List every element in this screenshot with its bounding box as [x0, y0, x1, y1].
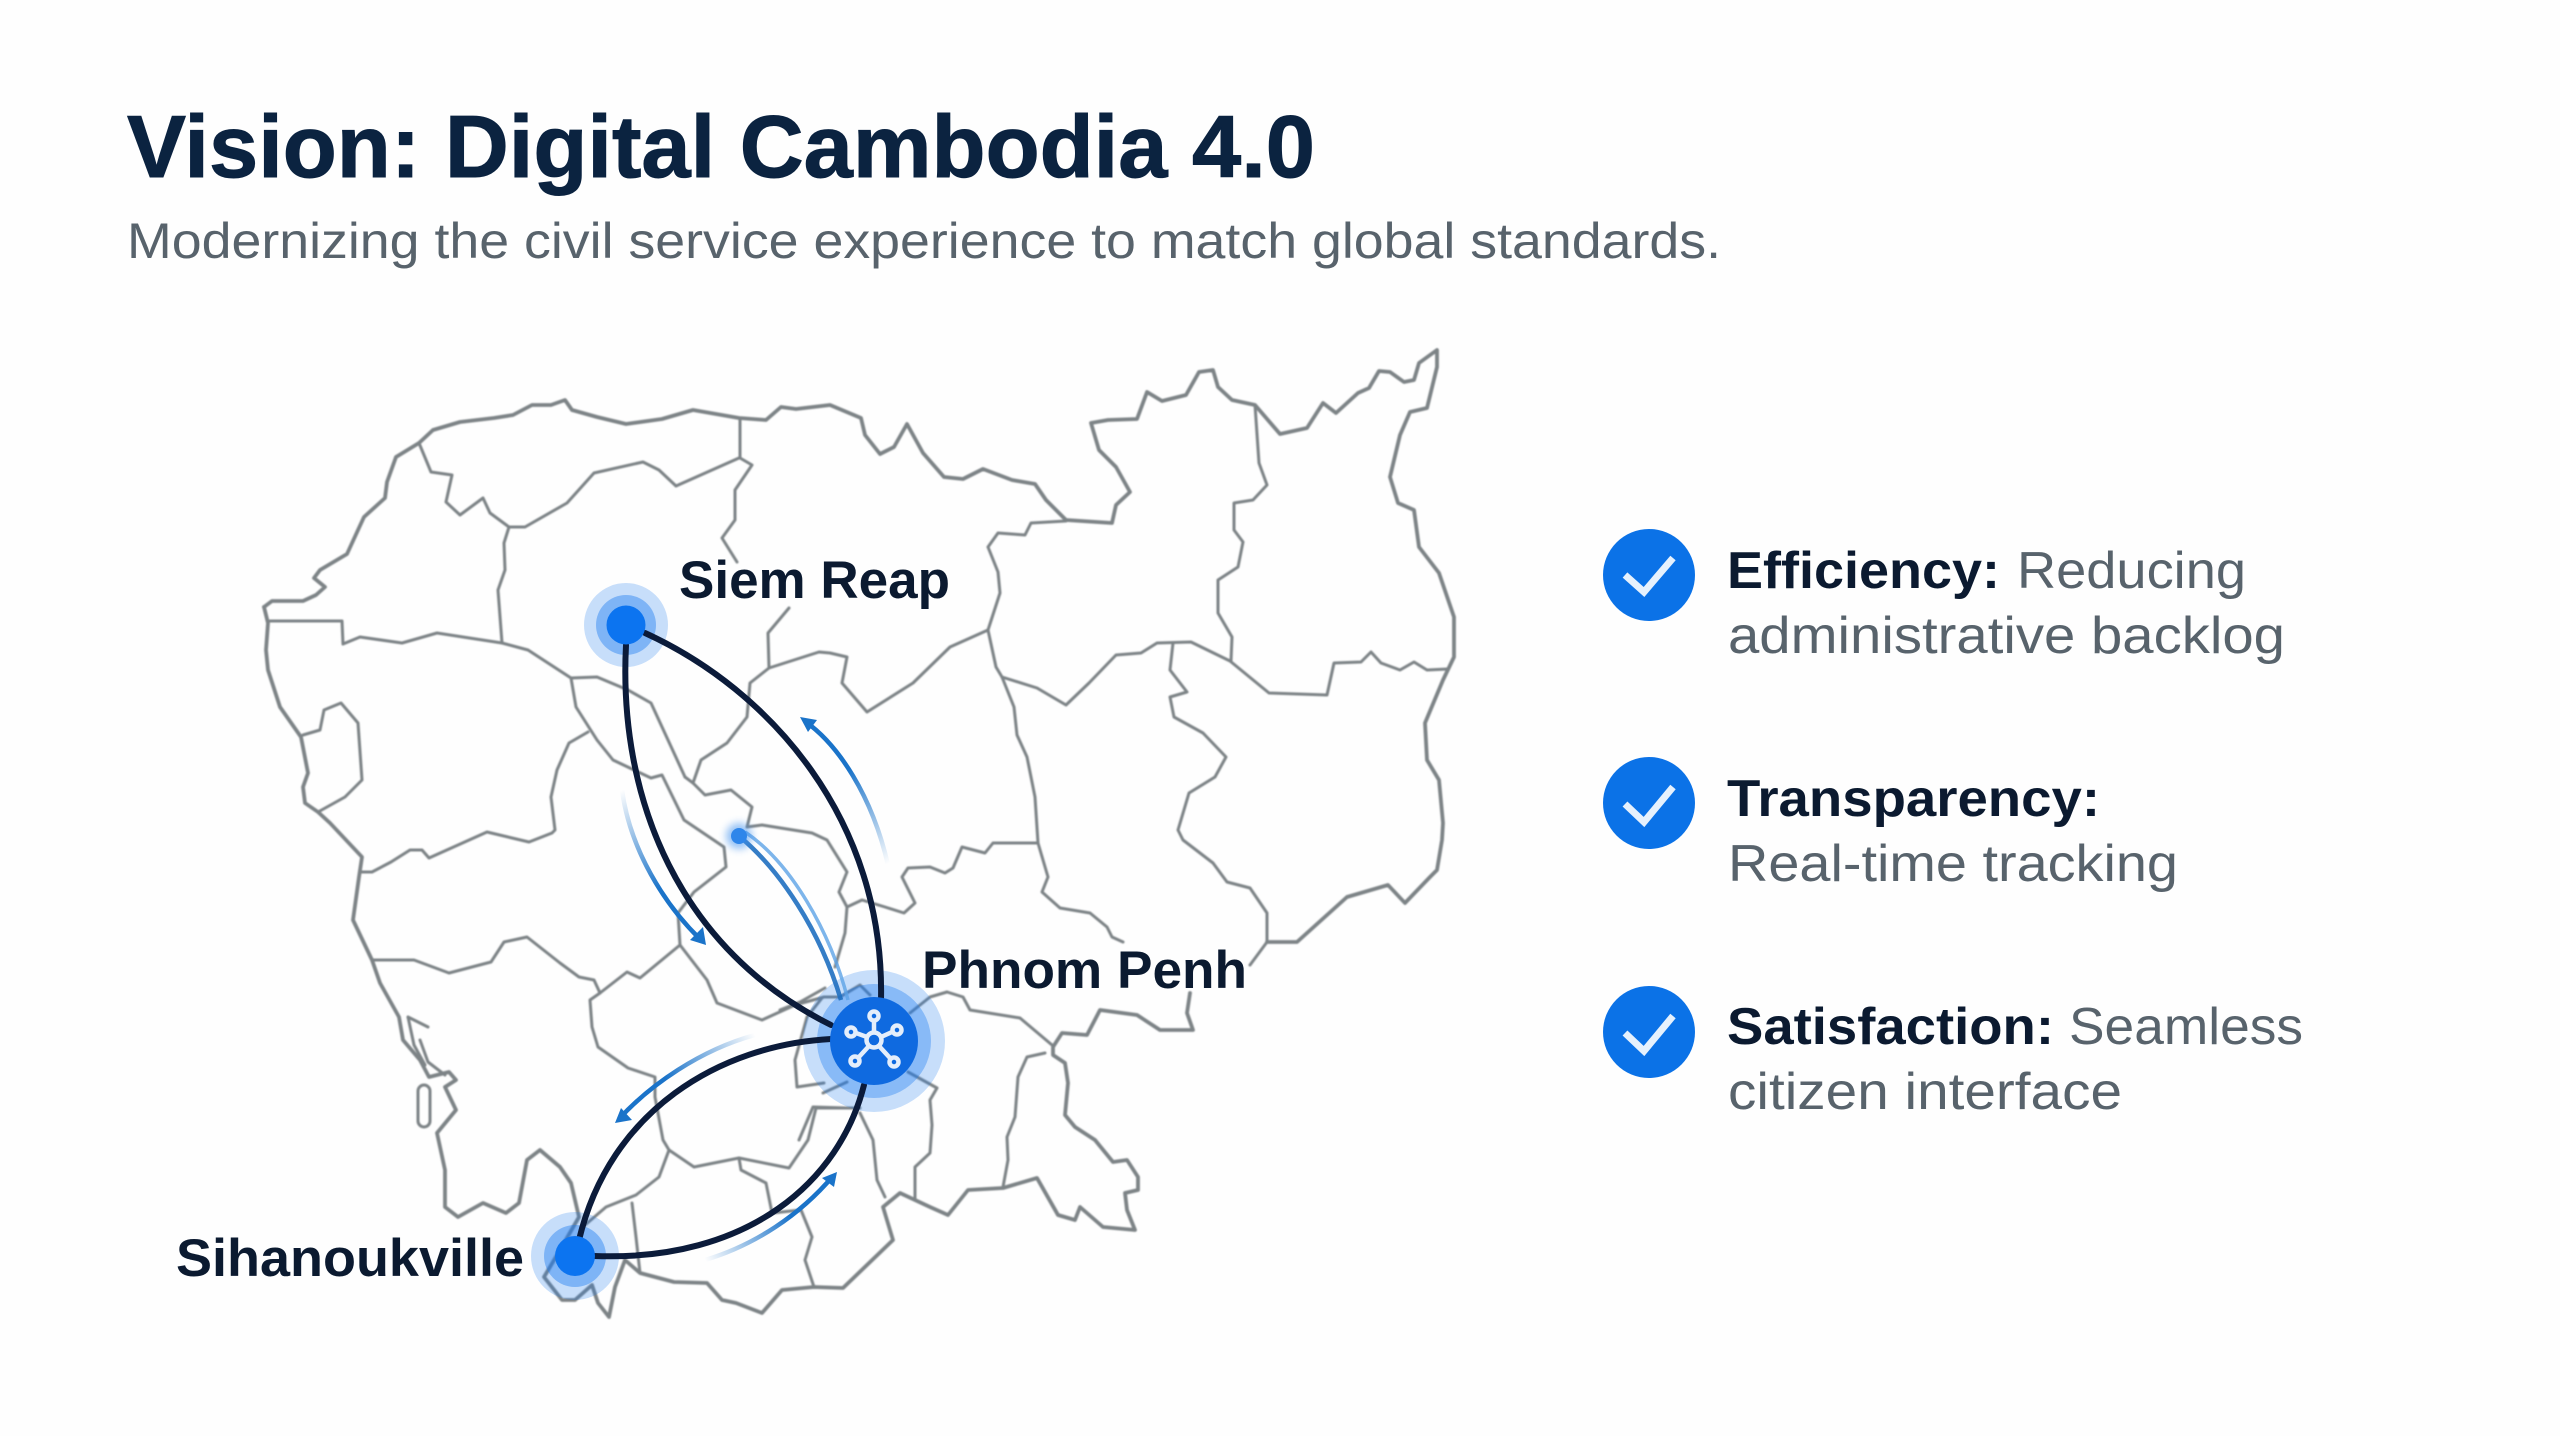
benefit: satisfaction: citizen interface — [1728, 1063, 2122, 1121]
benefit: transparency: Transparency: — [1727, 770, 2100, 828]
benefit: efficiency: Reducing — [2017, 542, 2246, 600]
benefit: efficiency: administrative backlog — [1728, 607, 2285, 665]
node: Sihanoukville — [555, 1236, 595, 1276]
benefit: efficiency — [1603, 529, 2285, 665]
blue flow arrow: towards hub lower — [705, 1172, 837, 1260]
label: Siem Reap: Siem Reap — [679, 551, 950, 610]
blue flow arrow: towards Siem Reap — [800, 717, 888, 865]
label: Sihanoukville: Sihanoukville — [176, 1229, 524, 1288]
node halo: Sihanoukville — [531, 1212, 619, 1300]
benefit: satisfaction — [1603, 986, 2303, 1121]
blue flow lines: central node to hub — [739, 832, 848, 1000]
label: Phnom Penh: Phnom Penh — [922, 941, 1247, 1000]
benefit: satisfaction: Seamless — [2069, 998, 2303, 1056]
connection lines — [579, 633, 881, 1256]
interior province borders — [270, 621, 685, 777]
outer border north and east — [264, 350, 1454, 942]
icon: check badge — [1603, 986, 1695, 1078]
blue flow arrow: towards Sihanoukville upper — [615, 1035, 755, 1123]
benefit: efficiency: Efficiency: — [1727, 542, 2000, 600]
node: Phnom Penh hub with network icon — [830, 997, 918, 1085]
node halo: Phnom Penh — [803, 970, 945, 1112]
map of Cambodia with province borders — [264, 350, 1454, 1317]
blue flow arrow: from Siem Reap — [622, 790, 706, 945]
benefit: transparency — [1603, 757, 2178, 893]
benefit: satisfaction: Satisfaction: — [1727, 998, 2054, 1056]
node halo: Siem Reap — [584, 583, 668, 667]
benefit: transparency: Real-time tracking — [1728, 835, 2178, 893]
icon: check badge — [1603, 529, 1695, 621]
title: Vision: Digital Cambodia 4.0 — [127, 97, 1315, 196]
node: Siem Reap — [606, 606, 646, 644]
subtitle: Modernizing the civil service experience to match global standards. — [127, 213, 1721, 269]
icon: check badge — [1603, 757, 1695, 849]
node: central small — [726, 823, 752, 849]
outer border south and west — [264, 607, 1193, 1317]
